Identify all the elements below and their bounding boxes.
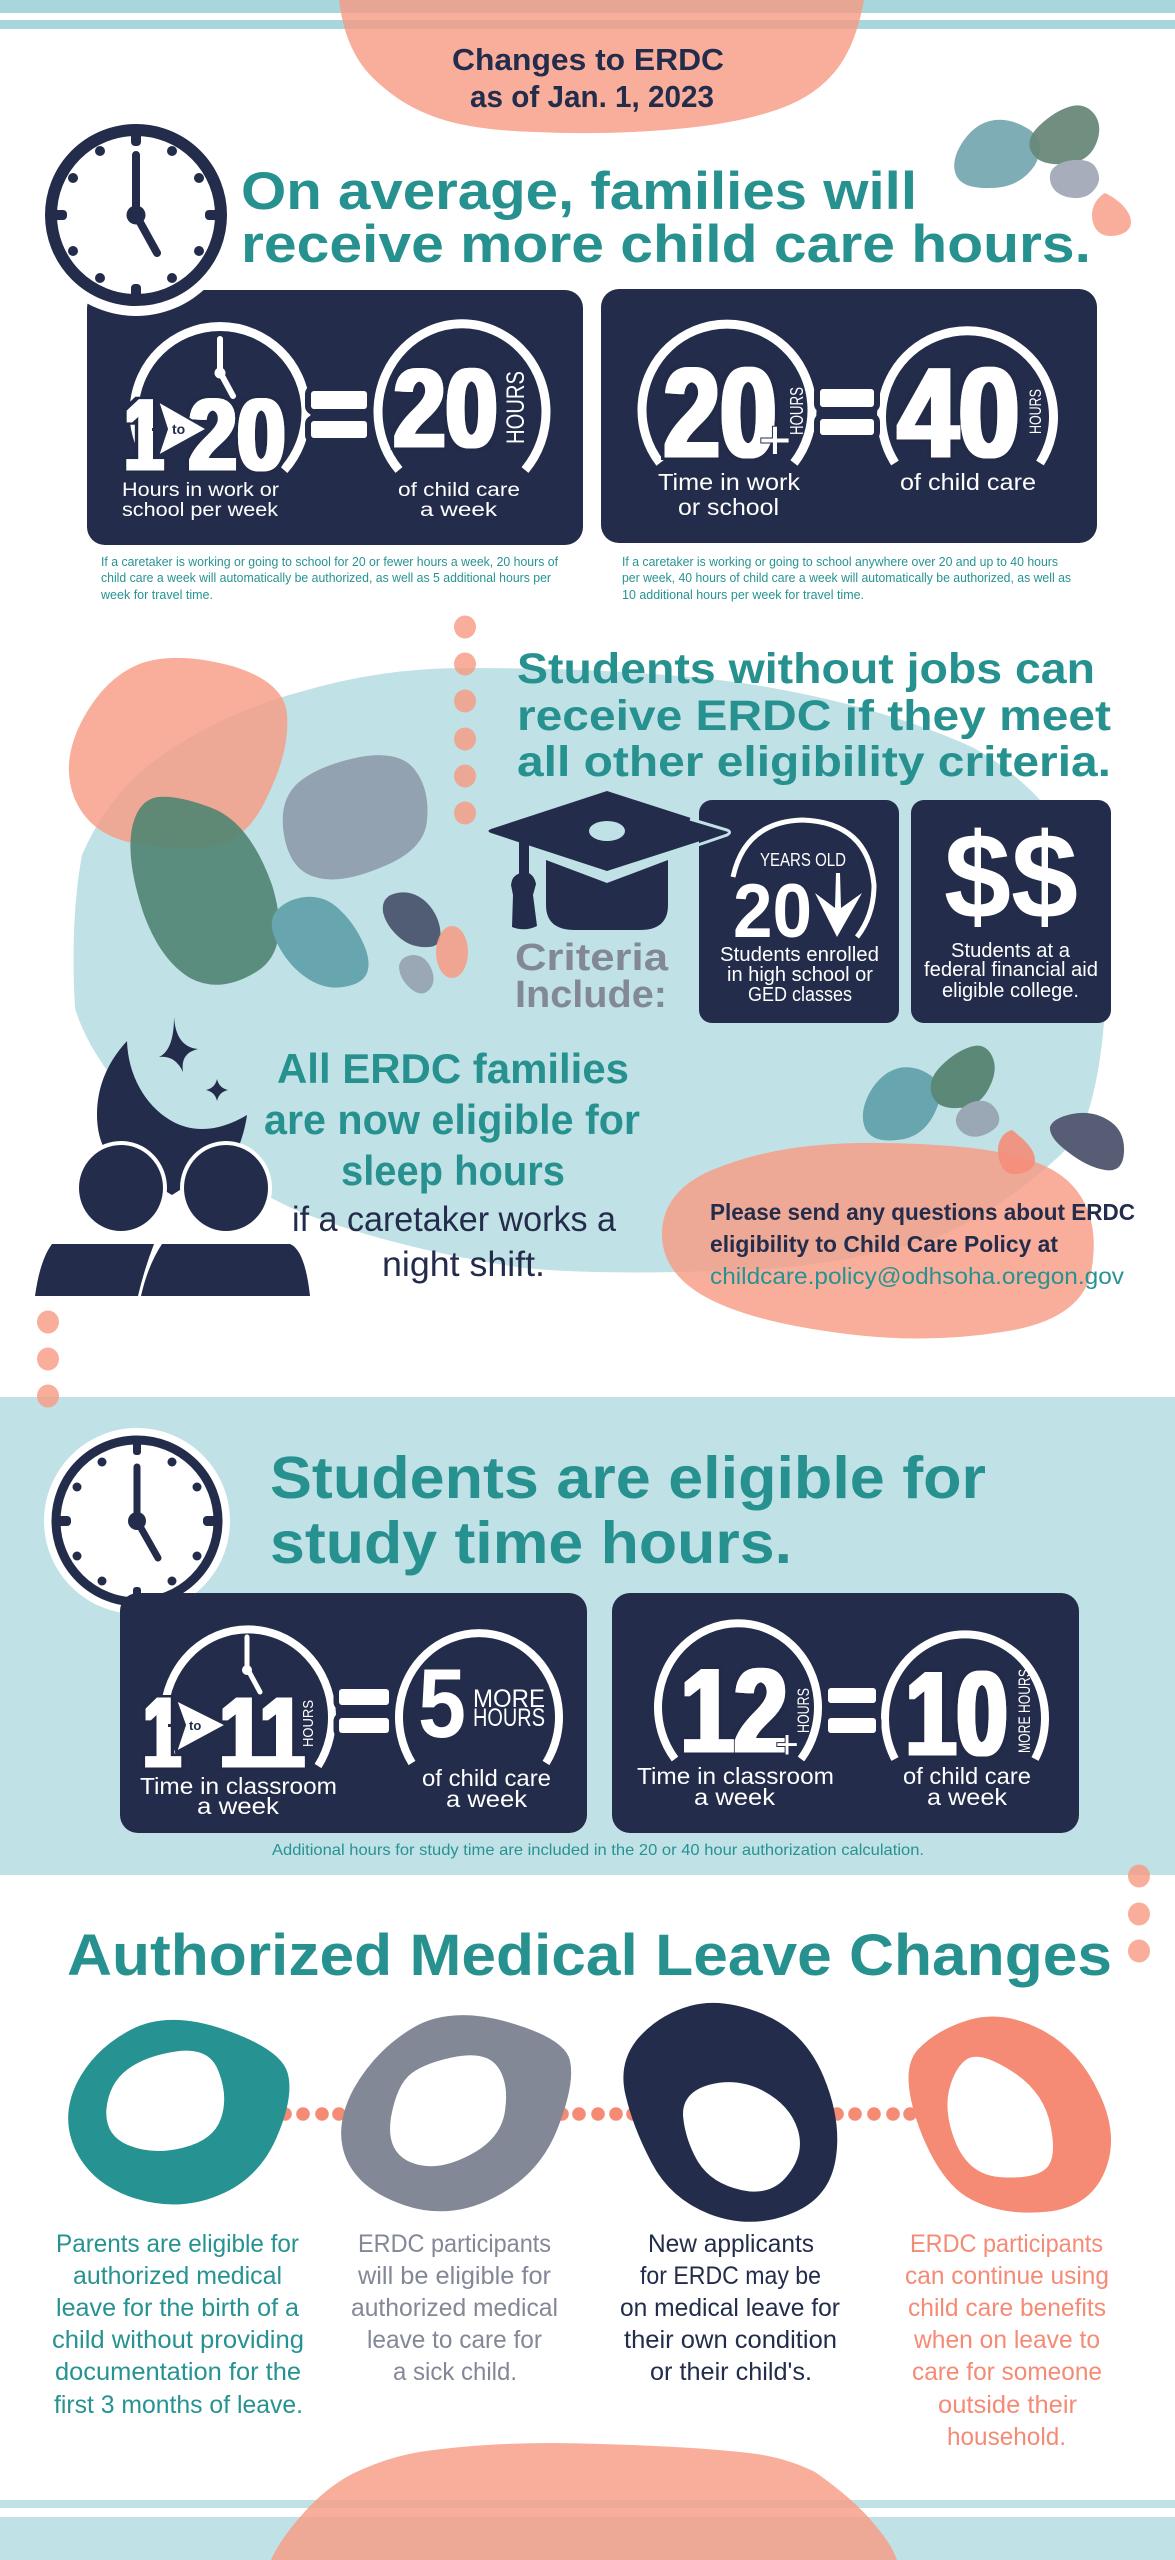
caption right [903,1763,1031,1810]
text: column 2 [351,2230,558,2386]
text: column 3: or their child's. [650,2358,812,2386]
panel: 1 to 11 hours equals 5 more [120,1593,587,1833]
text: column 4: outside their [938,2391,1077,2419]
footnote right: per week, 40 hours of child care a week will automatically be authorized, as well as [622,570,1071,585]
caption left [637,1763,834,1810]
text: column 2: will be eligible for [357,2262,551,2290]
arrow [168,1700,226,1752]
label HOURS: HOURS [1026,389,1045,434]
text: column 1: Parents are eligible for [56,2230,299,2258]
footnote: study time: Additional hours for study time are included in the 20 or 40 hour authorization calculation. [272,1842,924,1859]
text: column 1: authorized medical [73,2262,282,2290]
footnote right [622,554,1071,602]
text: column 3: their own condition [624,2326,837,2354]
caption left: or school [678,494,779,520]
background blob: students section [74,668,1105,1272]
icon: down arrow [815,873,862,937]
caption: eligible college. [942,980,1079,1002]
label HOURS: HOURS [787,387,807,435]
title blob [339,0,864,133]
number 20: 20 [733,869,812,954]
arrow: to [189,1718,201,1733]
top stripes [0,0,1175,29]
caption left [140,1773,337,1819]
number 5: 5 [418,1648,466,1758]
number 20: 20 [664,342,776,485]
text: column 3: New applicants [648,2230,814,2258]
heading: students without jobs: all other eligibility criteria. [517,738,1111,786]
number 10: 10 [906,1647,1008,1781]
arrow 1 to 20 [152,401,207,456]
text: column 4: child care benefits [908,2294,1106,2322]
caption right: of child care [422,1765,551,1791]
dollar signs: $$ [944,808,1078,944]
icon: clock hands [242,1637,260,1692]
plus sign: + [759,408,791,471]
caption [924,940,1098,1002]
number 20 hours: 20 [394,346,498,471]
caption right: of child care [903,1763,1031,1789]
panel: federal financial aid [911,800,1111,1023]
caption right: a week [927,1784,1008,1810]
text: sleep hours [264,1045,640,1284]
dotted connector: right [1128,1864,1150,1962]
caption right: a week [446,1786,528,1812]
caption left: Time in classroom [140,1773,337,1799]
equals sign [820,389,874,435]
caption: federal financial aid [924,959,1098,981]
footnote right: 10 additional hours per week for travel time. [622,587,864,602]
panel: 1 to 20 hours equals 20 hours [87,290,583,545]
equals sign [339,1689,389,1733]
caption: in high school or [727,964,873,986]
heading: study time [270,1445,986,1576]
label MORE HOURS: MORE HOURS [1015,1669,1034,1753]
heading: study time: Students are eligible for [270,1445,986,1511]
small salmon blob [998,1130,1035,1174]
ring: navy [623,2003,837,2222]
panel: age under 20 [699,800,899,1023]
text: column 1: child without providing [52,2326,304,2354]
caption: Students enrolled [720,944,879,966]
text: column 4: household. [947,2423,1066,2451]
text: column 2: authorized medical [351,2294,558,2322]
footnote left: week for travel time. [100,587,213,602]
text: sleep hours: are now eligible for [264,1096,640,1143]
title: Changes to ERDC [452,42,724,77]
heading: students without jobs: receive ERDC if they meet [517,692,1111,740]
title: as of Jan. 1, 2023 [470,79,714,114]
contact text [710,1199,1135,1289]
text: column 4: can continue using [905,2262,1109,2290]
text: column 4: ERDC participants [910,2230,1103,2258]
caption left: Hours in work or [122,480,280,501]
text: sleep hours: if a caretaker works a [292,1200,617,1239]
text: sleep hours: night shift. [382,1245,545,1284]
text: column 2: a sick child. [393,2358,517,2386]
heading: students without jobs: Students without jobs can [517,645,1095,693]
heading: more child care hours [241,162,1091,274]
text: column 1: first 3 months of leave. [54,2391,303,2419]
icon: clock hands [214,339,233,396]
icon: graduation cap [488,791,730,930]
caption left [122,480,280,521]
caption left [658,469,801,520]
text: column 1 [52,2230,304,2419]
dotted links between rings [278,2107,917,2121]
equals sign [828,1688,876,1733]
caption: Students at a [951,940,1071,962]
criteria label: Include: [515,974,667,1016]
icon: arc right [378,324,546,470]
text: column 3: on medical leave for [620,2294,840,2322]
icon: arc right [882,331,1054,463]
label HOURS: HOURS [502,371,530,444]
label HOURS: HOURS [300,1700,317,1747]
heading: medical leave: Authorized Medical Leave Changes [67,1923,1112,1988]
equals sign [311,391,367,438]
decorative blobs: top right [954,105,1131,236]
icon: clock study [44,1428,230,1614]
number 1: 1 [124,378,164,492]
ring: grey [341,2015,571,2211]
criteria label [515,937,669,1016]
dotted connector: upper [454,616,476,824]
label YEARS OLD: YEARS OLD [760,850,846,870]
caption left: school per week [122,500,279,521]
icon: arc right [399,1633,559,1763]
panel: 20+ hours equals 40 hours [601,289,1097,543]
decorative blobs: left cluster [69,658,468,994]
decorative blobs: lower right [863,1046,1124,1170]
heading: study time: study time hours. [270,1510,792,1576]
text: column 2: ERDC participants [358,2230,551,2258]
arc [733,820,874,937]
caption left: a week [197,1793,280,1819]
icon: arc right [885,1634,1045,1759]
label MORE HOURS: MORE [473,1685,545,1713]
caption left: Time in classroom [637,1763,834,1789]
icon: clock top [35,114,237,316]
caption right [422,1765,551,1812]
contact text: eligibility to Child Care Policy at [710,1231,1058,1257]
text: column 4: when on leave to [913,2326,1100,2354]
label MORE HOURS [473,1685,545,1732]
footnote left [100,554,558,602]
contact text: childcare.policy@odhsoha.oregon.gov [710,1263,1125,1289]
heading: more child care hours: On average, families will [241,162,917,221]
icon: clock outline left [134,327,306,470]
label MORE HOURS: HOURS [473,1704,545,1732]
footnote right: If a caretaker is working or going to school anywhere over 20 and up to 40 hours [622,554,1058,569]
panel: 12+ hours equals 10 more [612,1593,1079,1833]
caption right: of child care [398,480,520,501]
icon: clock arc [164,1629,332,1766]
caption left: Time in work [658,469,801,495]
caption right: of child care [900,469,1036,495]
bottom stripes [0,2500,1175,2560]
text: column 1: leave for the birth of a [56,2294,299,2322]
caption left: a week [694,1784,776,1810]
caption [720,944,879,1006]
label HOURS: HOURS [794,1688,813,1733]
number 40: 40 [898,342,1020,485]
number 1: 1 [144,1677,180,1789]
text: column 4: care for someone [912,2358,1102,2386]
ring: teal [68,2020,289,2205]
footnote left: child care a week will automatically be authorized, as well as 5 additional hours per [101,570,552,585]
footnote left: If a caretaker is working or going to school for 20 or fewer hours a week, 20 hours of [101,554,558,569]
number 20: 20 [188,378,286,492]
contact blob [662,1143,1094,1338]
icon: arc left [642,324,812,463]
text: column 3: for ERDC may be [640,2262,821,2290]
number 11: 11 [220,1677,304,1789]
ring: salmon [909,2017,1111,2213]
text: column 2: leave to care for [367,2326,542,2354]
arrow 1 to 20: to [172,421,185,437]
title [452,42,724,114]
number 12: 12 [680,1644,788,1778]
text: sleep hours: sleep hours [341,1147,565,1194]
bottom blob [271,2443,897,2560]
band: study time section [0,1397,1175,1875]
heading: students without jobs [517,645,1111,786]
icon: arc left [658,1623,818,1759]
contact text: Please send any questions about ERDC [710,1199,1135,1225]
heading: more child care hours: receive more child care hours. [241,215,1091,274]
text: sleep hours: All ERDC families [277,1045,629,1092]
caption right [398,480,520,521]
caption: GED classes [748,984,852,1006]
caption right: a week [420,500,498,521]
criteria label: Criteria [515,937,669,979]
text: column 4 [905,2230,1109,2451]
text: column 3 [620,2230,840,2386]
dotted connector: lower left [37,1310,59,1408]
text: column 1: documentation for the [55,2358,301,2386]
icon: moon, stars and sleeping people [35,1017,310,1296]
plus sign: + [775,1723,799,1767]
